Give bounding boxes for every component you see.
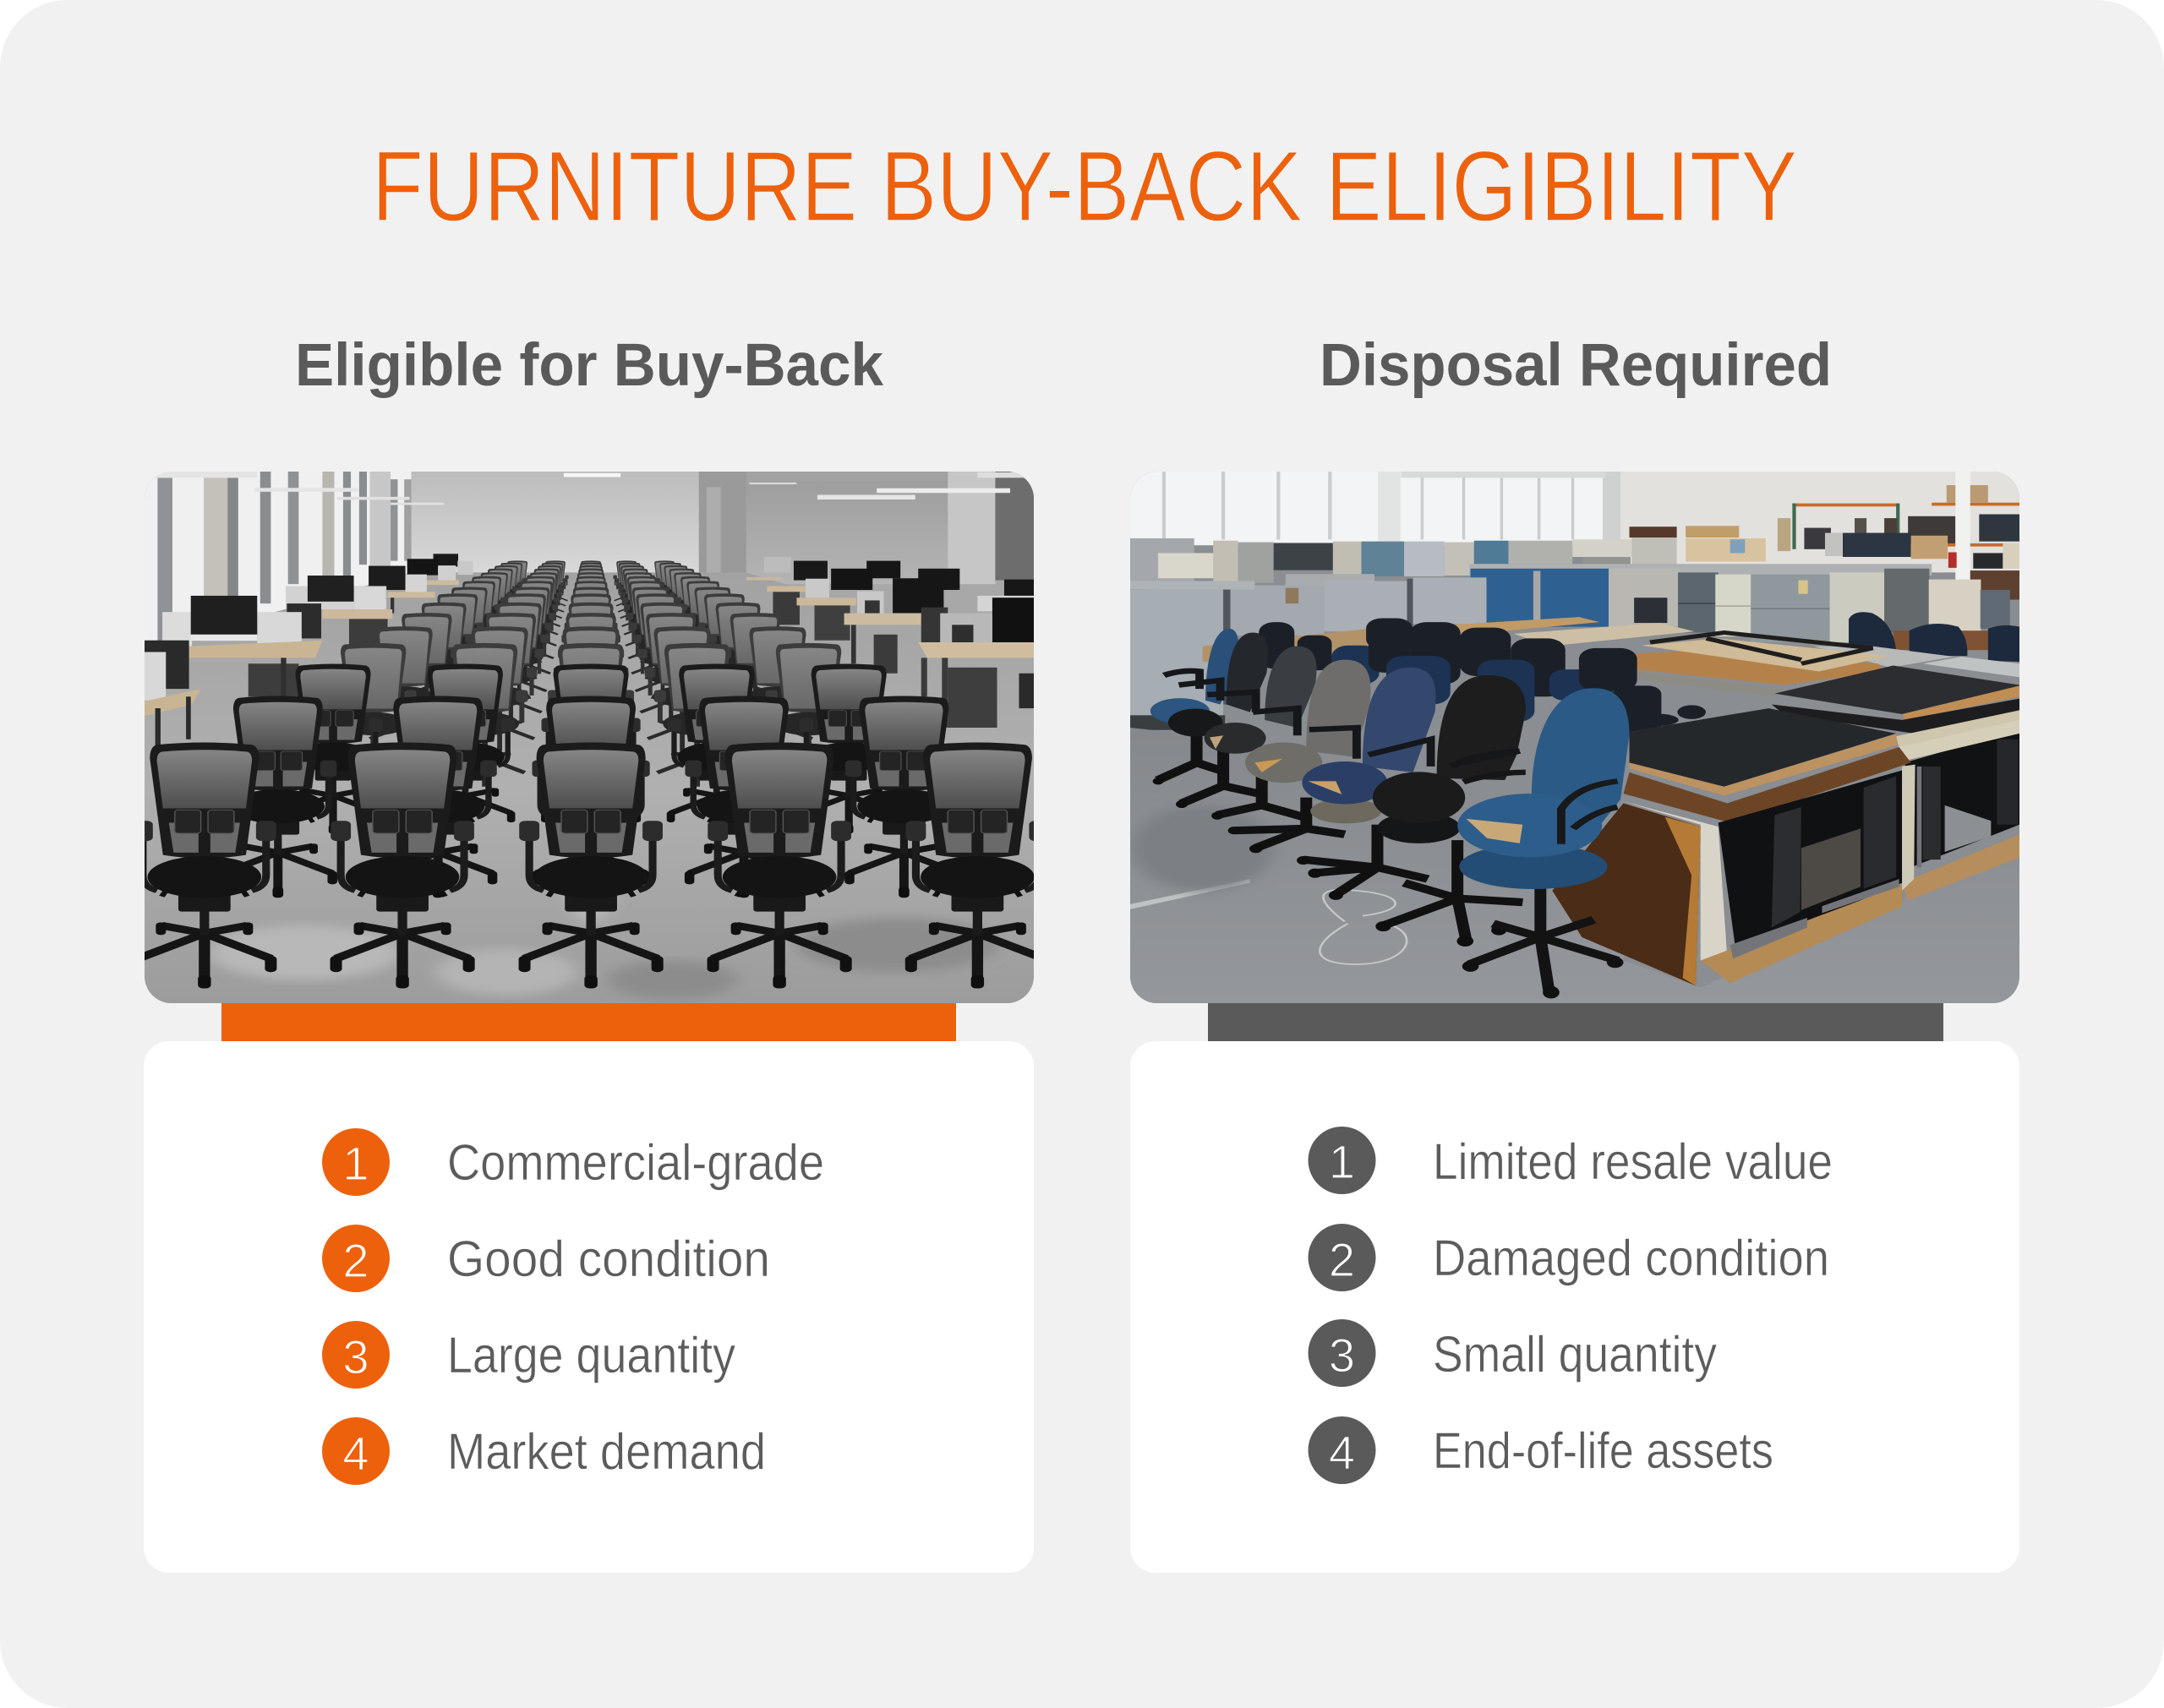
concrete floor [145, 572, 1034, 1003]
heading: eligible for buy-back: Eligible for Buy-Back [295, 332, 883, 399]
rear rows of dark chairs [1259, 619, 1706, 733]
item 3: small quantity: 3 [1329, 1329, 1355, 1382]
item 4: market demand: 4 [342, 1427, 369, 1480]
item 1: limited resale value: Limited resale value [1433, 1133, 1833, 1190]
grey connector bar [1208, 1003, 1943, 1041]
orange connector bar [221, 1003, 956, 1041]
arm rests [1164, 671, 1520, 767]
item 4: market demand: Market demand [447, 1423, 766, 1480]
navy chair [1302, 668, 1436, 823]
desks on the right [746, 557, 1034, 728]
photo: rows of new office chairs [132, 472, 1050, 1003]
windows on the left [145, 472, 444, 650]
chair casters [1153, 778, 1506, 947]
warehouse wall and shelving [1620, 472, 2019, 600]
carpet floor [1130, 728, 2019, 1003]
item 1: commercial-grade [322, 1128, 824, 1196]
item 1: limited resale value [1309, 1127, 1833, 1194]
glass room on the right [699, 472, 1034, 584]
ceiling light [564, 473, 620, 477]
black chair [1168, 633, 1268, 737]
grey fabric chair [1245, 660, 1370, 783]
item 2: damaged condition: Damaged condition [1433, 1230, 1829, 1286]
heading: disposal required: Disposal Required [1320, 332, 1832, 399]
stacked desks with black tops [1552, 666, 2019, 985]
item 3: large quantity: Large quantity [447, 1327, 735, 1383]
item 3: small quantity: Small quantity [1433, 1326, 1717, 1383]
photo: damaged furniture in a warehouse [1130, 472, 2019, 1003]
item 1: limited resale value: 1 [1329, 1135, 1355, 1188]
windows [1130, 472, 1620, 545]
black fabric chair [1373, 675, 1526, 843]
item 2: damaged condition: 2 [1329, 1233, 1355, 1286]
filing cabinets [1678, 569, 2010, 642]
back wall [412, 472, 702, 581]
loose cable [1320, 890, 1407, 964]
item 4: end-of-life assets: End-of-life assets [1433, 1422, 1773, 1479]
item 4: market demand [322, 1417, 766, 1485]
item 3: small quantity [1309, 1319, 1717, 1387]
black leather chair [1205, 647, 1316, 754]
back tables and far chairs [1443, 612, 2019, 696]
chair bases [1158, 728, 1522, 941]
front blue chair [1457, 688, 1630, 998]
title: FURNITURE BUY-BACK ELIGIBILITY [372, 131, 1797, 243]
item 4: end-of-life assets [1309, 1416, 1773, 1484]
item 2: good condition: Good condition [447, 1231, 770, 1287]
back row of cubicles [1130, 538, 1932, 586]
blue and grey partitions [1130, 569, 1680, 730]
front row of damaged chairs [1150, 629, 1630, 998]
item 2: good condition [322, 1225, 770, 1292]
desks on the left [145, 554, 473, 745]
item 1: commercial-grade: Commercial-grade [447, 1134, 824, 1191]
panel: eligible criteria [144, 1041, 1034, 1573]
blue chair at rear of line [1150, 629, 1238, 723]
item 2: good condition: 2 [342, 1234, 369, 1287]
item 2: damaged condition [1309, 1224, 1829, 1291]
item 1: commercial-grade: 1 [342, 1137, 369, 1190]
item 3: large quantity [322, 1321, 735, 1389]
item 4: end-of-life assets: 4 [1329, 1426, 1355, 1479]
chair rows, far to near [132, 560, 1050, 989]
item 3: large quantity: 3 [342, 1330, 369, 1383]
panel: disposal criteria [1130, 1041, 2019, 1573]
